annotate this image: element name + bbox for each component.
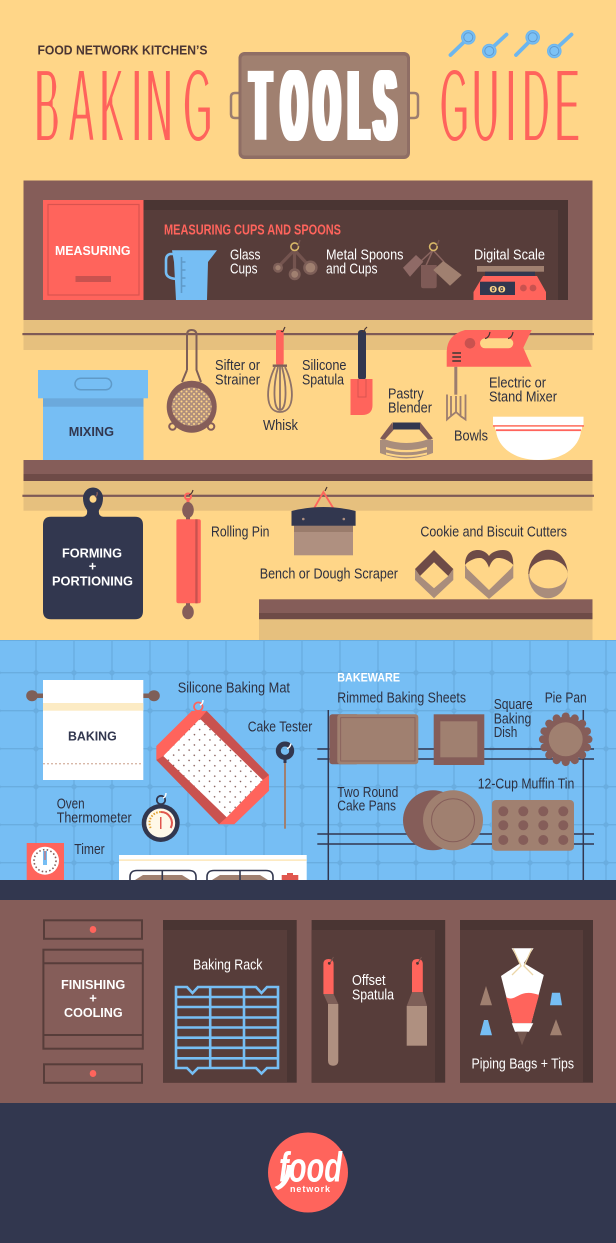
shelf interior xyxy=(144,200,568,300)
tools word: TOOLS xyxy=(251,50,396,162)
compartment two xyxy=(312,920,445,1083)
label: silicone spatula xyxy=(302,358,346,388)
icon: digital scale xyxy=(474,266,546,300)
label: silicone spatula: Silicone xyxy=(302,358,346,374)
title: Food Network Kitchen's Baking Tools Guide xyxy=(35,30,579,165)
icon: cooling rack xyxy=(176,987,278,1074)
label: piping bags and tips: Piping Bags + Tips xyxy=(472,1057,574,1073)
icons: piping tips xyxy=(480,986,562,1035)
icon: digital scale: 00 xyxy=(489,284,506,296)
label: pastry blender xyxy=(388,386,432,416)
guide word: GUIDE xyxy=(440,46,579,165)
panel: baking tile wall xyxy=(0,640,616,880)
finishing and cooling drawers xyxy=(43,920,143,1083)
label: two round cake pans: Cake Pans xyxy=(337,799,396,815)
compartment one xyxy=(163,920,297,1083)
icon: round cake pans xyxy=(403,790,483,850)
icon: pie pan xyxy=(539,712,592,766)
label: two round cake pans: Two Round xyxy=(337,785,398,801)
label: 12-cup muffin tin: 12-Cup Muffin Tin xyxy=(478,776,574,792)
icon: electric mixer xyxy=(447,330,532,420)
label: offset spatula: Offset xyxy=(352,973,386,989)
drawer knobs xyxy=(90,926,96,1077)
label: pastry blender: Blender xyxy=(388,400,432,416)
label: offset spatula: Spatula xyxy=(352,987,395,1003)
logo: food network: food xyxy=(279,1144,343,1190)
icon: offset spatula wide xyxy=(407,957,427,1046)
wire rack xyxy=(317,710,594,880)
icon: whisk xyxy=(268,327,292,412)
icon: muffin tin xyxy=(492,800,574,851)
logo: food network: network xyxy=(290,1184,331,1194)
label: pie pan: Pie Pan xyxy=(545,690,587,706)
label: rolling pin: Rolling Pin xyxy=(211,525,270,541)
icon: mixing box xyxy=(38,370,148,460)
label: square baking dish: Square xyxy=(494,697,533,713)
label: oven thermometer: Oven xyxy=(57,796,85,812)
icon: spatula xyxy=(350,327,372,415)
label: metal spoons and cups: Metal Spoons xyxy=(326,248,404,264)
icon: piping bag xyxy=(501,948,544,1045)
shadow band under middle shelf xyxy=(24,481,592,511)
pan icon xyxy=(231,52,418,159)
heading: bakeware: BAKEWARE xyxy=(337,671,400,685)
icon: cake tester xyxy=(278,744,292,829)
icon: pastry blender xyxy=(380,422,433,458)
icon: rolling pin xyxy=(176,490,201,619)
lower right shelf xyxy=(259,599,592,640)
icon: forming and portioning cutting board xyxy=(43,488,143,619)
icon: bench scraper xyxy=(292,487,356,555)
label: cookie and biscuit cutters: Cookie and Biscuit Cutters xyxy=(420,525,567,541)
icon: glass measuring cup xyxy=(166,250,217,300)
icon: rimmed baking sheets xyxy=(329,714,418,764)
counter top band xyxy=(0,880,616,900)
label: timer: Timer xyxy=(74,842,105,858)
panel: finishing and cooling cabinet xyxy=(0,900,616,1103)
icon: oven thermometer xyxy=(142,793,180,842)
icon: silicone baking mat xyxy=(156,700,269,824)
label: sifter or strainer xyxy=(215,358,260,388)
label: whisk: Whisk xyxy=(263,418,299,434)
icon: mixing box: MIXING xyxy=(69,424,114,439)
measuring category box xyxy=(43,200,144,300)
label: silicone spatula: Spatula xyxy=(302,372,345,388)
icon: metal measuring spoons xyxy=(273,240,318,280)
finishing and cooling label: FINISHING xyxy=(61,977,125,992)
icon: baking towel xyxy=(26,680,160,780)
icon: baking towel: BAKING xyxy=(68,728,117,743)
icon: heart cutter xyxy=(465,550,513,599)
middle shelf xyxy=(24,460,592,481)
label: offset spatula xyxy=(352,973,395,1003)
finishing and cooling label: + xyxy=(89,990,97,1006)
compartment three xyxy=(460,920,593,1083)
label: square baking dish xyxy=(494,697,533,741)
hanging rail two xyxy=(22,495,594,497)
label: baking rack: Baking Rack xyxy=(193,957,263,973)
icon: round cutter xyxy=(528,550,568,598)
icon: mixing bowl xyxy=(493,417,584,460)
label: square baking dish: Baking xyxy=(494,711,531,727)
subtitle: FOOD NETWORK KITCHEN’S xyxy=(38,42,208,58)
hanging rail one xyxy=(22,333,594,335)
label: sifter or strainer: Strainer xyxy=(215,372,260,388)
panel: measuring shelf unit xyxy=(24,180,592,320)
measuring category box: MEASURING xyxy=(55,243,130,258)
label: cake tester: Cake Tester xyxy=(248,720,312,736)
label: electric or stand mixer xyxy=(489,376,557,406)
label: oven thermometer: Thermometer xyxy=(57,810,132,826)
label: bench or dough scraper: Bench or Dough Scraper xyxy=(260,566,398,582)
label: metal spoons and cups xyxy=(326,248,404,278)
label: silicone baking mat: Silicone Baking Mat xyxy=(178,681,290,697)
icon: offset spatula narrow xyxy=(323,957,338,1066)
label: glass cups: Glass xyxy=(230,248,260,264)
icon: forming and portioning cutting board: FORMING xyxy=(62,545,122,560)
icon: forming and portioning cutting board: + xyxy=(89,559,97,574)
icon: sifter xyxy=(167,330,217,433)
icon: kitchen timer xyxy=(27,843,64,880)
finishing and cooling label xyxy=(61,977,125,1020)
label: square baking dish: Dish xyxy=(494,725,517,741)
label: glass cups: Cups xyxy=(230,262,258,278)
icon: square baking dish xyxy=(434,714,484,765)
label: metal spoons and cups: and Cups xyxy=(326,262,378,278)
label: electric or stand mixer: Electric or xyxy=(489,376,546,392)
footer band xyxy=(0,1103,616,1243)
label: digital scale: Digital Scale xyxy=(474,248,545,264)
label: rimmed baking sheets: Rimmed Baking Sheets xyxy=(337,690,466,706)
label: electric or stand mixer: Stand Mixer xyxy=(489,390,557,406)
label: pastry blender: Pastry xyxy=(388,386,424,402)
icon: oven range xyxy=(119,855,307,880)
logo: food network xyxy=(268,1132,348,1212)
finishing and cooling label: COOLING xyxy=(64,1005,123,1020)
label: sifter or strainer: Sifter or xyxy=(215,358,260,374)
measuring spoons icons xyxy=(450,30,572,58)
background: yellow wall xyxy=(0,0,616,640)
label: two round cake pans xyxy=(337,785,398,815)
heading: measuring cups and spoons: MEASURING CUPS AND SPOONS xyxy=(164,222,341,238)
icon: metal measuring cups xyxy=(403,240,462,288)
icon: forming and portioning cutting board: PORTIONING xyxy=(52,573,133,588)
baking word: BAKING xyxy=(35,46,212,165)
label: glass cups xyxy=(230,248,260,278)
label: bowls: Bowls xyxy=(454,429,488,445)
icon: diamond cutter xyxy=(415,550,453,598)
shadow band under measuring shelf xyxy=(24,320,592,350)
label: oven thermometer xyxy=(57,796,132,826)
